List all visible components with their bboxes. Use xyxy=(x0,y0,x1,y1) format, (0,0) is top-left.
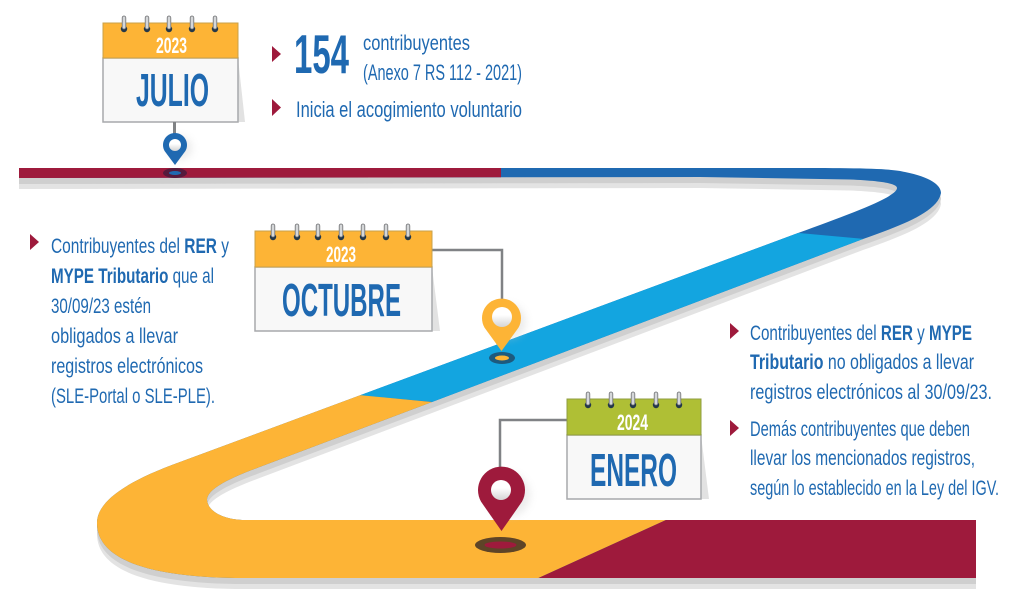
calendar: octubre 2023: OCTUBRE xyxy=(282,274,401,326)
calendar: octubre 2023: 2023 xyxy=(326,242,356,267)
calendar: julio 2023 xyxy=(103,16,245,122)
pin: enero xyxy=(475,467,530,553)
text block: octubre details: Contribuyentes del RER y xyxy=(51,235,229,258)
text block: julio details xyxy=(272,23,522,122)
text block: julio details: (Anexo 7 RS 112 - 2021) xyxy=(363,60,522,85)
text block: octubre details: 30/09/23 estén xyxy=(51,295,151,318)
text block: octubre details: MYPE Tributario que al xyxy=(51,265,214,288)
calendar: julio 2023: 2023 xyxy=(156,33,187,58)
text block: julio details: 154 xyxy=(294,23,349,85)
text block: julio details: Inicia el acogimiento voluntario xyxy=(296,97,522,122)
text block: octubre details: registros electrónicos xyxy=(51,355,203,378)
text block: enero details: Tributario no obligados a llevar xyxy=(750,351,974,374)
calendar: enero 2024: ENERO xyxy=(590,444,677,496)
text block: octubre details: (SLE-Portal o SLE-PLE). xyxy=(51,385,215,408)
calendar: octubre 2023 xyxy=(255,224,502,331)
winding road timeline xyxy=(19,168,976,589)
text block: enero details xyxy=(730,322,999,500)
text block: octubre details xyxy=(30,234,229,408)
text block: julio details: contribuyentes xyxy=(363,32,470,55)
pin: octubre xyxy=(482,299,526,364)
calendar: julio 2023: JULIO xyxy=(136,64,209,116)
calendar: enero 2024 xyxy=(500,392,709,499)
pin: julio xyxy=(163,122,192,178)
text block: enero details: Contribuyentes del RER y MYPE xyxy=(750,322,972,345)
text block: octubre details: obligados a llevar xyxy=(51,325,178,348)
calendar: enero 2024: 2024 xyxy=(617,410,648,435)
